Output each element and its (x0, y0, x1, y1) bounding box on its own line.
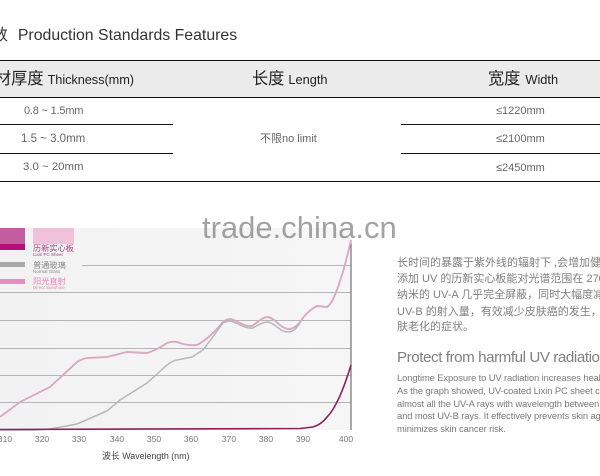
row 3 width: ≤2450mm (496, 162, 545, 174)
legend: Normal Glass (33, 269, 61, 274)
legend: 普通玻璃 (33, 260, 66, 270)
text block: Chinese description (397, 256, 600, 333)
row 1 thickness: 0.8 ~ 1.5mm (24, 105, 83, 117)
legend: Direct Sunshine (33, 285, 65, 290)
legend: Lixin PC Sheet (33, 252, 64, 257)
legend: 阳光直射 (33, 276, 66, 286)
x axis labels: 380 (259, 434, 273, 444)
watermark: trade.china.cn (202, 210, 397, 245)
text block: English description: minimizes skin cancer risk. (397, 423, 506, 434)
x axis labels: 360 (184, 434, 198, 444)
line chart: UV transmission by wavelength (0, 228, 353, 461)
header: width: 宽度 Width (488, 70, 558, 88)
row 3 thickness: 3.0 ~ 20mm (23, 161, 83, 173)
x axis labels (0, 434, 353, 444)
panel: specification table (0, 60, 600, 182)
x axis labels: 350 (147, 434, 161, 444)
text block: Chinese description: UV-B 的射入量，有效减少皮肤癌的发生， (397, 306, 600, 318)
table header band (0, 60, 600, 98)
row 2 width: ≤2100mm (496, 133, 545, 145)
row 1 width: ≤1220mm (496, 105, 545, 117)
header: length: 长度 Length (252, 70, 328, 88)
curve: direct sunlight (0, 240, 351, 417)
legend: 历新实心板 (33, 243, 74, 253)
legend (0, 228, 74, 290)
x axis labels: 320 (35, 434, 49, 444)
curve: normal glass (0, 321, 300, 430)
x axis labels: 340 (110, 434, 124, 444)
curve: Lixin PC sheet (0, 365, 351, 430)
text block: English description (397, 372, 600, 434)
x axis labels: 330 (72, 434, 86, 444)
x axis labels: 370 (222, 434, 236, 444)
length value: 不限no limit (260, 133, 317, 145)
x axis labels: 390 (296, 434, 310, 444)
x axis title: 波长 Wavelength (nm) (102, 450, 190, 461)
text block: Chinese description: 肤老化的症状。 (397, 321, 474, 333)
text block: Chinese description: 添加 UV 的历新实心板能对光谱范围在 270 (397, 273, 600, 285)
x axis labels: 400 (339, 434, 353, 444)
row 2 thickness: 1.5 ~ 3.0mm (21, 133, 85, 145)
